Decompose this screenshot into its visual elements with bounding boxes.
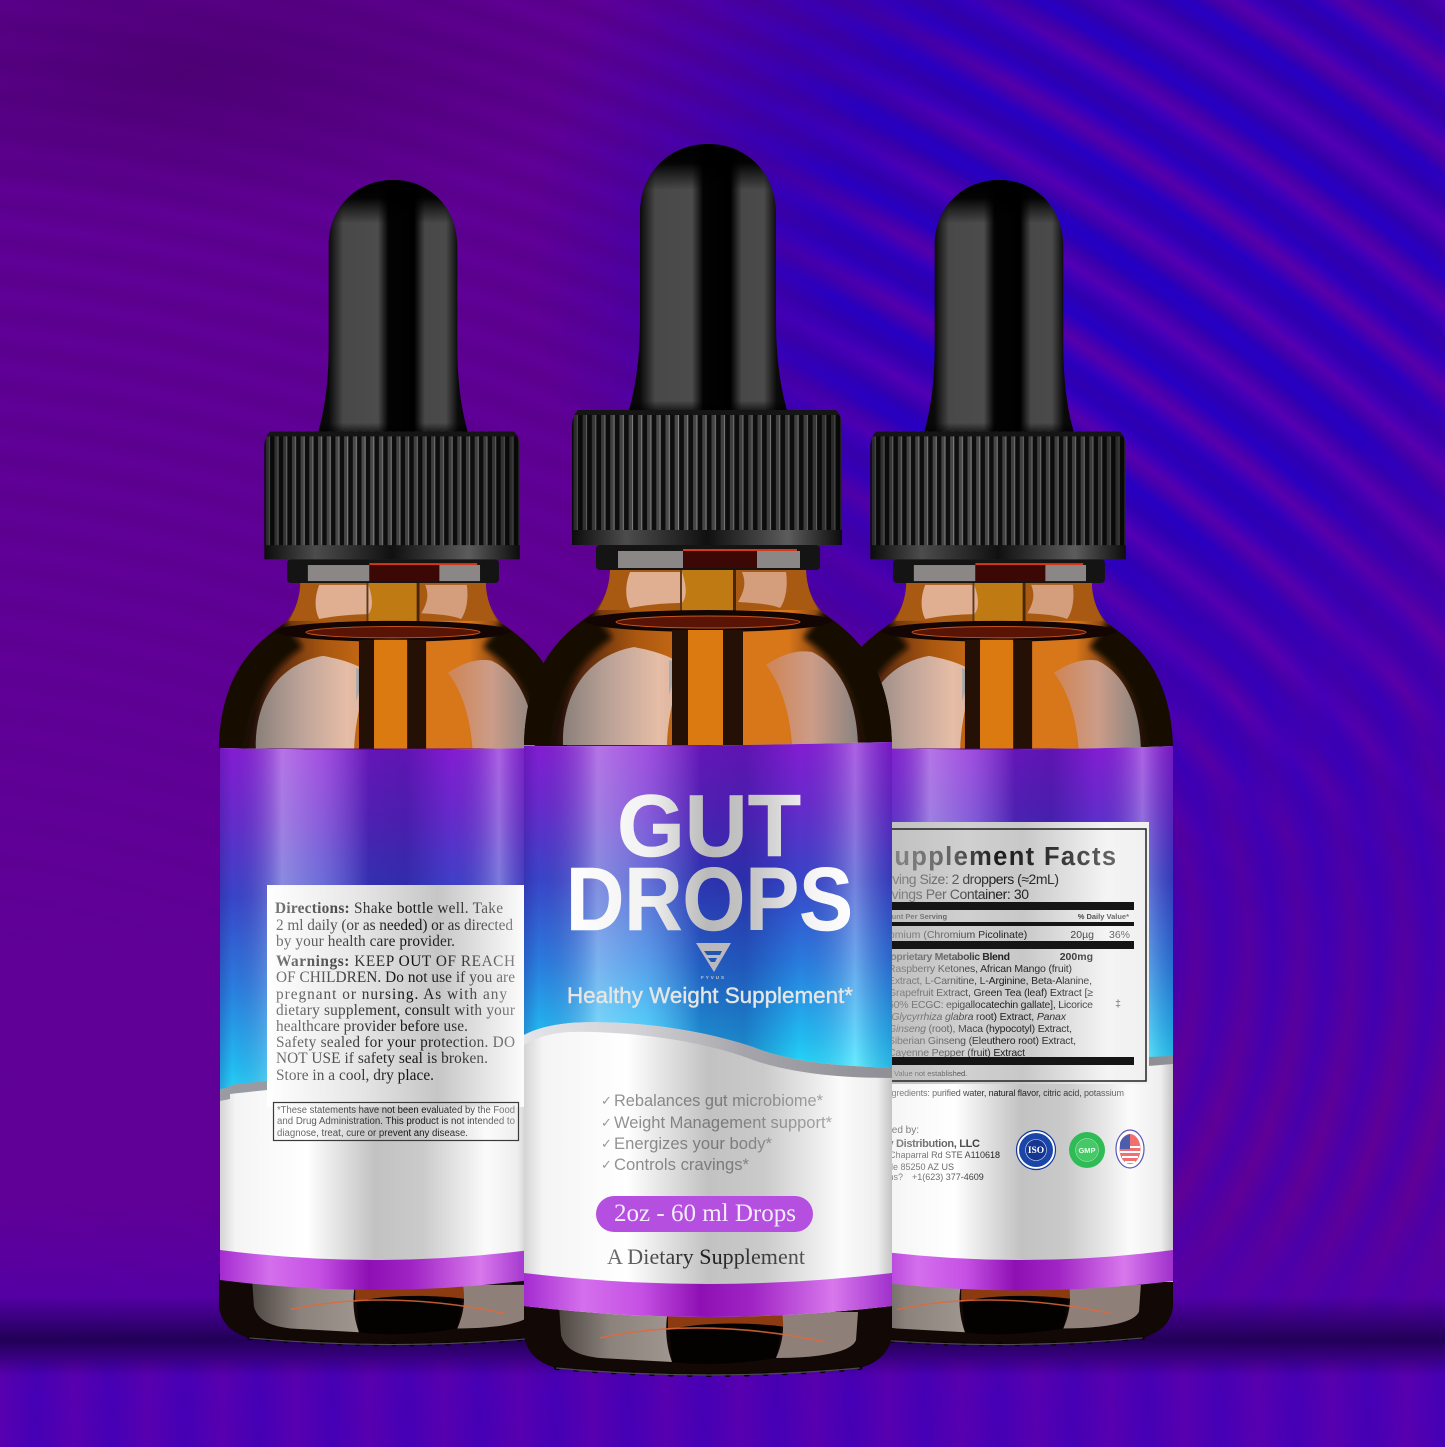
supplement facts panel: [855, 822, 1149, 1182]
center bottle: front label: [520, 144, 896, 1375]
floor shadow: [0, 1296, 1445, 1376]
directions and warnings text: Directions: Shake bottle well. Take: [275, 900, 503, 917]
supplement facts panel: Vitality Distribution, LLC: [860, 1138, 980, 1150]
benefits checklist: ✓: [601, 1115, 612, 1130]
supplement facts panel: E Chaparral Rd STE A110618: [881, 1150, 1000, 1160]
benefits checklist: Energizes your body*: [614, 1135, 773, 1153]
left bottle: directions label: [215, 180, 571, 1345]
supplement facts panel: +1(623) 377-4609: [912, 1172, 984, 1182]
badge: ISO certified: ISO: [1028, 1146, 1044, 1156]
benefits checklist: Weight Management support*: [614, 1114, 833, 1132]
dietary supplement line: A Dietary Supplement: [607, 1244, 805, 1269]
supplement facts panel: 50% ECGC: epigallocatechin gallate], Licorice: [888, 999, 1093, 1011]
benefits checklist: Rebalances gut microbiome*: [614, 1092, 824, 1110]
benefits checklist: ✓: [601, 1136, 612, 1151]
supplement facts panel: (Glycyrrhiza glabra root) Extract, Panax: [888, 1011, 1067, 1023]
disclaimer box: *These statements have not been evaluated by the Food: [277, 1105, 515, 1116]
supplement facts panel: Raspberry Ketones, African Mango (fruit): [888, 963, 1072, 975]
right bottle: supplement facts label: [821, 180, 1177, 1345]
supplement facts panel: Value not established.: [894, 1069, 967, 1078]
directions and warnings text: by your health care provider.: [276, 933, 455, 950]
supplement facts panel: Cayenne Pepper (fruit) Extract: [888, 1047, 1025, 1059]
disclaimer box: and Drug Administration. This product is not intended to: [277, 1116, 515, 1127]
directions and warnings text: Store in a cool, dry place.: [276, 1067, 434, 1084]
supplement facts panel: Serving Size: 2 droppers (≈2mL): [872, 871, 1059, 887]
benefits checklist: Controls cravings*: [614, 1156, 750, 1174]
badge: USA flag: [1116, 1130, 1144, 1168]
supplement facts panel: Questions?: [857, 1172, 903, 1182]
supplement facts panel: % Daily Value*: [1078, 912, 1129, 921]
badge: GMP: GMP: [1078, 1146, 1096, 1155]
directions and warnings text: 2 ml daily (or as needed) or as directed: [276, 917, 513, 934]
title: Gut Drops: DROPS: [566, 850, 853, 950]
supplement facts panel: ‡: [1115, 998, 1121, 1010]
left label body: [220, 748, 530, 1290]
badge: GMP: [1069, 1132, 1105, 1168]
size pill: [596, 1196, 813, 1232]
disclaimer box: [274, 1102, 518, 1140]
supplement facts panel: 200mg: [1060, 951, 1093, 963]
supplement facts panel: Scottsdale 85250 AZ US: [856, 1162, 954, 1172]
size pill: 2oz - 60 ml Drops: [614, 1200, 796, 1227]
center label body: [524, 742, 892, 1317]
supplement facts panel: Chromium (Chromium Picolinate): [872, 929, 1027, 941]
logo: Fyvus triangle mark: FYVUS: [701, 975, 726, 980]
directions and warnings text: Safety sealed for your protection. DO: [276, 1034, 515, 1051]
logo: Fyvus triangle mark: [696, 943, 731, 980]
directions and warnings text: [275, 900, 515, 1084]
directions and warnings text: NOT USE if safety seal is broken.: [276, 1050, 488, 1067]
badge: ISO certified: [1016, 1130, 1056, 1170]
supplement facts panel: 36%: [1109, 929, 1130, 941]
directions and warnings text: OF CHILDREN. Do not use if you are: [276, 969, 515, 986]
directions and warnings text: dietary supplement, consult with your: [276, 1002, 515, 1019]
directions and warnings text: Warnings: KEEP OUT OF REACH: [276, 953, 515, 970]
benefits checklist: ✓: [601, 1093, 612, 1108]
right label body: [869, 746, 1173, 1290]
title: Gut Drops: GUT: [617, 776, 801, 875]
disclaimer box: diagnose, treat, cure or prevent any disease.: [277, 1128, 468, 1139]
directions and warnings text: pregnant or nursing. As with any: [276, 986, 507, 1003]
supplement facts panel: Other Ingredients: purified water, natural flavor, citric acid, potassium: [860, 1088, 1124, 1098]
supplement facts panel: Supplement Facts: [876, 843, 1116, 871]
supplement facts panel: 20µg: [1070, 929, 1094, 941]
title: Gut Drops: [566, 776, 853, 950]
directions and warnings text: healthcare provider before use.: [276, 1018, 468, 1035]
supplement facts panel: Extract, L-Carnitine, L-Arginine, Beta-Alanine,: [888, 975, 1092, 987]
subtitle: Healthy Weight Supplement*: [567, 983, 853, 1008]
supplement facts panel: Siberian Ginseng (Eleuthero root) Extract,: [888, 1035, 1076, 1047]
benefits checklist: ✓: [601, 1157, 612, 1172]
benefits checklist: [601, 1092, 833, 1174]
supplement facts panel: Servings Per Container: 30: [871, 886, 1029, 902]
supplement facts panel: Amount Per Serving: [875, 912, 948, 921]
supplement facts panel: Proprietary Metabolic Blend: [880, 951, 1010, 963]
supplement facts panel: Distributed by:: [855, 1125, 919, 1136]
supplement facts panel: Grapefruit Extract, Green Tea (leaf) Extract [≥: [888, 987, 1093, 999]
supplement facts panel: Ginseng (root), Maca (hypocotyl) Extract,: [888, 1023, 1072, 1035]
